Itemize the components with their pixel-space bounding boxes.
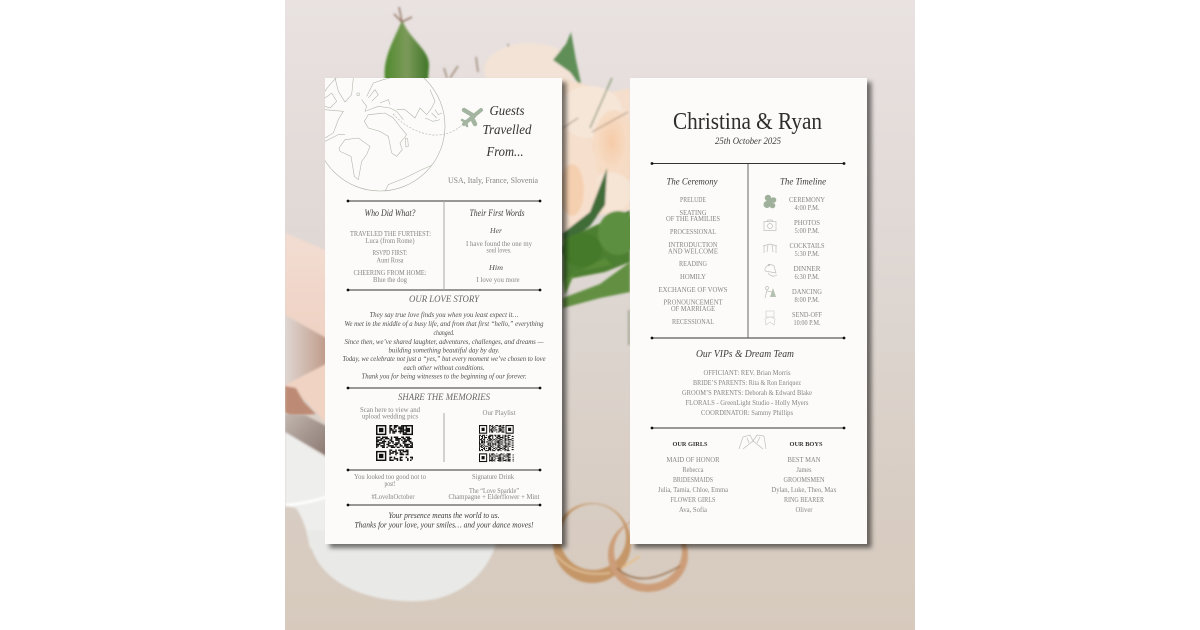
VIPs and dream team: OFFICIANT: REV. Brian Morris [704,369,791,377]
post and hashtag note [354,473,426,501]
signature drink: The “Love Sparkle” [469,487,519,495]
section dividers [651,162,845,429]
VIPs and dream team: Our VIPs & Dream Team [696,349,794,360]
VIPs and dream team: BRIDE’S PARENTS: Rita & Ron Enriquez [693,379,801,387]
white bucket [285,414,498,601]
photo background [285,0,915,630]
our boys list: RING BEARER [784,496,824,504]
our love story: building something beautiful day by day. [388,346,500,354]
share the memories [360,392,516,420]
their first words: I love you more [476,276,520,284]
peach roses and leaves [484,32,638,345]
the timeline list: CEREMONY [789,196,825,204]
our love story: Thank you for being witnesses to the beginning of our forever. [362,372,527,380]
icon: ceremony flower [764,195,776,208]
share the memories: upload wedding pics [362,412,418,420]
the timeline list: SEND-OFF [792,311,822,319]
our love story: We met in the middle of a busy life, and from that first “hello,” everything [344,319,544,328]
the timeline list: 5:00 P.M. [794,227,820,235]
post and hashtag note: You looked too good not to [354,473,426,481]
the ceremony list: PRELUDE [680,196,706,204]
our love story: They say true love finds you when you least expect it… [370,310,519,319]
their first words [466,208,532,284]
our girls list: OUR GIRLS [672,441,708,448]
the timeline list: 6:30 P.M. [794,273,820,281]
closing thank you: Thanks for your love, your smiles… and your dance moves! [354,520,534,530]
icon: dancing couple [765,286,776,298]
our love story: each other without conditions. [404,363,485,372]
right card [630,78,867,544]
our boys list [772,441,837,514]
the timeline list: COCKTAILS [790,242,825,250]
the ceremony list: INTRODUCTION [668,241,718,249]
icon: cocktail glasses [763,244,777,253]
signature drink [448,473,540,501]
the ceremony list [658,176,728,326]
our love story: Today, we celebrate not just a “yes,” but every moment we’ve chosen to love [342,354,546,363]
the timeline list: 8:00 P.M. [794,296,820,304]
upper rose behind card [485,44,576,80]
our boys list: James [796,466,812,474]
the ceremony list: SEATING [680,209,706,217]
their first words: Her [489,226,502,235]
the timeline list: 4:00 P.M. [794,204,820,212]
who did what [350,208,431,284]
satin ribbon [285,234,325,422]
script heading: guests travelled from: Travelled [482,123,532,138]
the ceremony list: RECESSIONAL [672,318,714,326]
our boys list: Dylan, Luke, Theo, Max [772,486,837,494]
QR code: playlist [479,426,514,462]
our girls list: BRIDESMAIDS [673,476,713,484]
QR code: wedding pics [376,426,413,460]
share the memories: Scan here to view and [360,406,420,414]
our love story: changed. [434,328,455,337]
closing thank you [354,510,534,530]
icon: pinky promise hands [739,435,766,449]
wedding program mockup scene [285,0,915,630]
our girls list [658,441,729,514]
gold wedding rings [553,503,688,592]
who did what: Luca (from Rome) [366,237,415,245]
post and hashtag note: post! [384,480,396,488]
couple names title: Christina & Ryan [673,109,822,135]
who did what: CHEERING FROM HOME: [354,269,427,277]
script heading: guests travelled from: Guests [490,104,525,119]
our boys list: OUR BOYS [790,441,823,448]
our girls list: Julia, Tamia, Chloe, Emma [658,486,729,494]
the ceremony list: OF THE FAMILIES [666,215,720,223]
the ceremony list: OF MARRIAGE [671,305,715,313]
VIPs and dream team: FLORALS - GreenLight Studio - Holly Myers [686,399,809,407]
who did what: Who Did What? [364,208,416,218]
signature drink: Signature Drink [472,473,514,481]
wedding date: 25th October 2025 [715,136,781,146]
our boys list: BEST MAN [788,456,820,464]
our love story: OUR LOVE STORY [409,294,480,304]
who did what: TRAVELED THE FURTHEST: [350,230,431,238]
the timeline list: 5:30 P.M. [794,250,820,258]
our girls list: Rebecca [682,466,704,474]
closing thank you: Your presence means the world to us. [388,510,500,520]
the ceremony list: EXCHANGE OF VOWS [658,286,728,294]
dashed flight path [393,114,462,135]
icon: dinner cloche [765,264,777,276]
the ceremony list: READING [679,260,707,268]
the ceremony list: The Ceremony [666,176,718,186]
our love story: Since then, we’ve shared laughter, adventures, challenges, and dreams — [344,337,544,346]
icon: camera [764,220,776,230]
the timeline list: 10:00 P.M. [794,319,821,327]
their first words: Their First Words [470,208,525,218]
post and hashtag note: #LoveInOctober [372,493,415,501]
left card [315,61,562,544]
VIPs and dream team [682,349,812,417]
the ceremony list: HOMILY [680,273,706,281]
globe illustration [325,78,446,192]
the timeline list: PHOTOS [794,219,820,227]
VIPs and dream team: COORDINATOR: Sammy Phillips [701,409,793,417]
our boys list: Oliver [796,506,813,514]
the timeline list: DANCING [792,288,822,296]
the ceremony list: PROCESSIONAL [670,228,716,236]
our boys list: GROOMSMEN [784,476,824,484]
green sepal and buds [563,168,607,246]
the timeline list: The Timeline [780,176,826,186]
who did what: RSVPD FIRST: [372,249,408,257]
their first words: I have found the one my [466,240,532,248]
script heading: guests travelled from: From... [486,145,524,160]
icon: airplane [462,110,481,126]
who did what: Blue the dog [373,276,407,284]
icon: send-off gift [765,311,775,325]
the ceremony list: AND WELCOME [668,248,718,256]
guest countries: USA, Italy, France, Slovenia [448,176,538,185]
share the memories: Our Playlist [482,409,516,417]
our love story [342,294,546,380]
the ceremony list: PRONOUNCEMENT [664,298,723,306]
rose bud [385,7,512,80]
share the memories: SHARE THE MEMORIES [398,392,490,402]
script heading: guests travelled from [482,104,532,160]
their first words: Him [488,263,504,272]
our girls list: Ava, Sofia [679,506,708,514]
signature drink: Champagne + Elderflower + Mint [448,493,540,501]
our girls list: MAID OF HONOR [666,456,720,464]
our girls list: FLOWER GIRLS [670,496,716,504]
section dividers [347,200,541,506]
VIPs and dream team: GROOM’S PARENTS: Deborah & Edward Blake [682,389,812,397]
who did what: Aunt Rosa [376,256,404,264]
the timeline list [780,176,826,327]
their first words: soul loves. [486,246,512,254]
the timeline list: DINNER [794,265,821,273]
